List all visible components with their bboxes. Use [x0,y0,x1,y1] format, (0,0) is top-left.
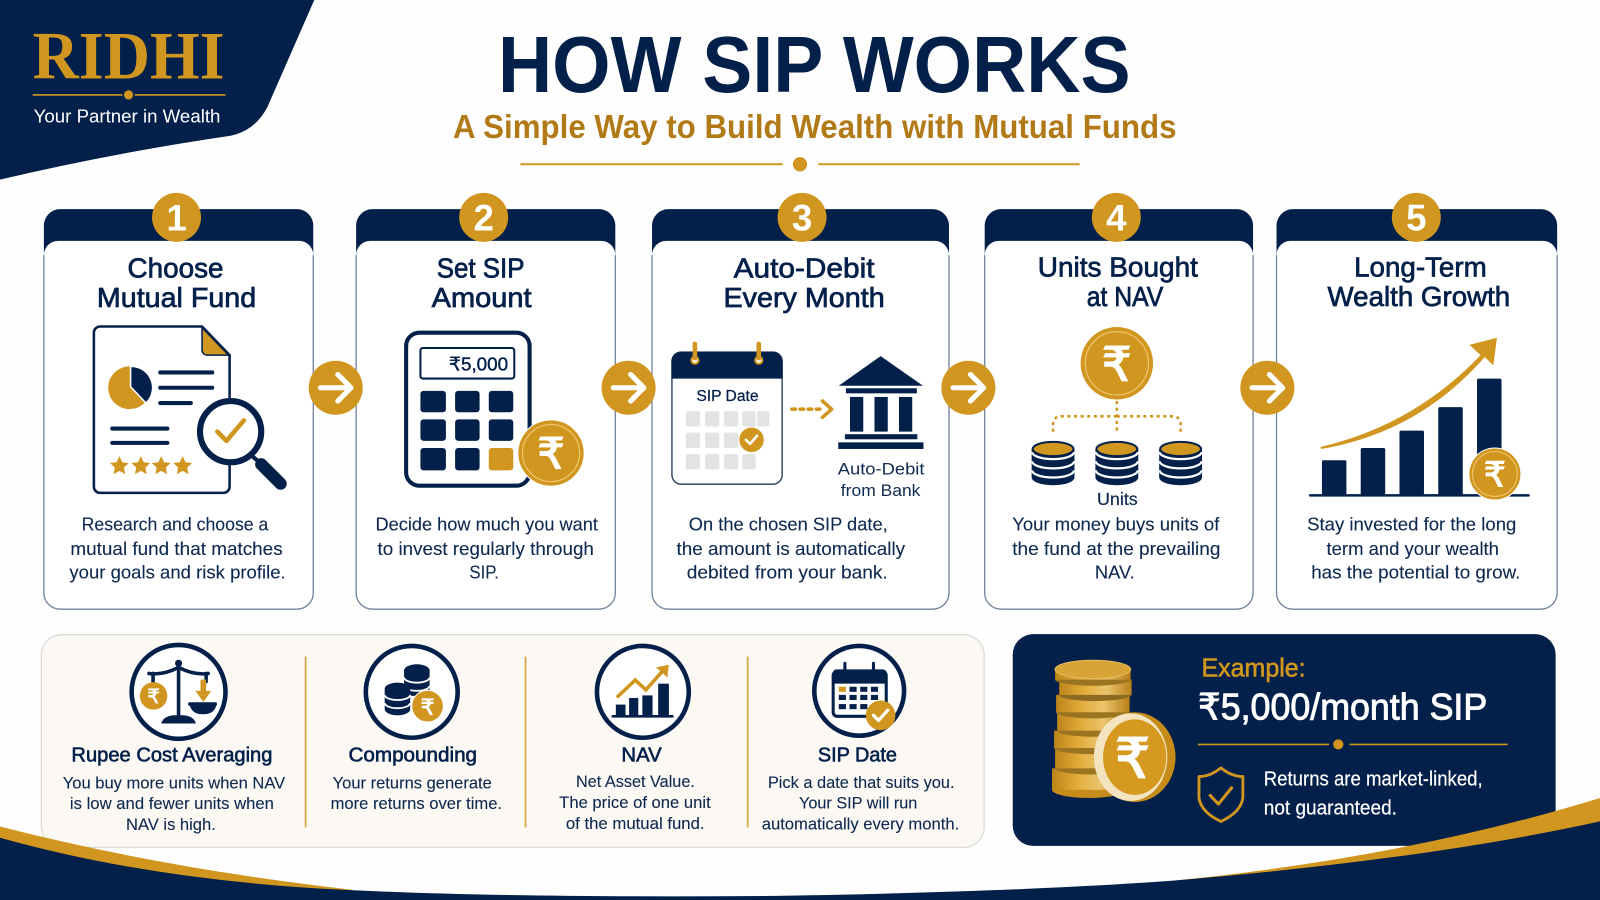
step 1 text: your goals and risk profile. [69,562,286,583]
logo wordmark: RIDHI [33,19,224,94]
arrow: step 1 to 2 [309,361,363,415]
icon: calculator with coin [406,333,584,486]
step number 2: 2 [473,198,494,239]
concept text: NAV is high. [126,815,216,834]
step 2 heading: Set SIP [437,253,524,284]
concept: NAV [559,646,711,833]
icon: calculator with coin: ₹ [537,430,565,478]
concept: rupee cost averaging [63,645,286,834]
step 2 text: SIP. [469,562,499,583]
icon: bank [838,356,923,449]
arrow: dotted calendar to bank [792,401,832,417]
concept heading: Rupee Cost Averaging [71,745,272,767]
concept heading: SIP Date [818,745,897,767]
step 4 heading: at NAV [1087,281,1164,312]
concept heading: Compounding [348,745,477,767]
step 5 text: term and your wealth [1327,538,1499,559]
example amount: ₹5,000/month SIP [1198,686,1487,727]
step number 3: 3 [792,198,812,239]
step 5 text: Stay invested for the long [1307,514,1516,535]
icon: coin stacks [366,646,458,738]
icon: balance scale: ₹ [147,686,160,708]
step number 3 [778,193,827,242]
panel: step 4 [985,193,1253,609]
step number 4: 4 [1106,198,1127,239]
step 3 text: debited from your bank. [687,562,888,583]
concept: SIP date [762,646,959,834]
panel: step 3 [652,193,949,609]
logo badge [0,0,314,180]
step 5 heading: Wealth Growth [1328,281,1510,312]
unit stack 2 [1095,442,1138,485]
step 3 heading: Auto-Debit [734,253,875,284]
step 4 text: Your money buys units of [1012,514,1220,535]
units label: Units [1097,489,1138,509]
step number 1: 1 [166,198,187,239]
icon: calculator with coin: ₹5,000 [449,353,508,374]
concept text: Net Asset Value. [576,772,695,791]
step 4 text: the fund at the prevailing [1012,538,1220,559]
icon: growth chart: ₹ [1484,457,1506,495]
icon: SIP date calendar: SIP Date [696,388,759,405]
concept heading: NAV [621,745,662,767]
example note: not guaranteed. [1264,797,1397,819]
example divider [1198,739,1508,749]
icon: coin to units: ₹ [1102,339,1132,391]
panel: example [1013,634,1556,846]
example note: Returns are market-linked, [1264,769,1483,791]
icon: gold coin stack: ₹ [1115,728,1150,790]
step 2 text: Decide how much you want [376,514,598,535]
bank label: Auto-Debit [838,460,925,478]
logo divider [33,90,226,99]
step number 5: 5 [1406,198,1427,239]
bank label: from Bank [841,482,921,500]
panel: key concepts [41,635,984,847]
step number 4 [1092,193,1141,242]
concept text: Pick a date that suits you. [768,773,955,792]
icon: shield check [1199,768,1243,821]
step 3 heading: Every Month [723,282,885,313]
bottom wave [0,798,1600,900]
step 5 heading: Long-Term [1354,252,1487,283]
panel: step 1 [44,193,313,609]
panel: step 2 [356,193,615,609]
icon: NAV chart [597,646,689,738]
concept text: You buy more units when NAV [63,773,286,792]
arrow: step 2 to 3 [602,361,656,415]
step 2 text: to invest regularly through [378,538,594,559]
step 1 text: Research and choose a [82,514,269,535]
example label: Example: [1202,655,1306,683]
subtitle: A Simple Way to Build Wealth with Mutual Funds [453,109,1177,146]
step number 1 [152,193,201,242]
icon: balance scale [132,645,226,739]
concept text: automatically every month. [762,815,959,834]
title: HOW SIP WORKS [498,20,1131,109]
arrow: step 3 to 4 [941,361,995,415]
concept text: is low and fewer units when [70,794,274,813]
panel: step 5 [1277,193,1557,609]
step 4 text: NAV. [1095,562,1135,583]
step 1 heading: Choose [128,253,223,284]
concept: compounding [331,646,502,813]
step 5 text: has the potential to grow. [1311,562,1520,583]
step 3 text: On the chosen SIP date, [689,514,888,535]
concept text: The price of one unit [559,793,711,812]
icon: gold coin stack [1052,660,1176,802]
icon: coin stacks: ₹ [421,695,434,719]
icon: calendar with check [814,646,904,736]
concept text: of the mutual fund. [566,814,705,833]
icon: coin to units [1032,327,1202,485]
icon: SIP date calendar [671,344,783,484]
step 2 heading: Amount [432,282,532,313]
arrow: step 4 to 5 [1240,361,1294,415]
unit stack 1 [1032,442,1074,485]
title divider [520,157,1080,171]
icon: growth chart [1310,338,1529,500]
concept text: more returns over time. [331,794,502,813]
unit stack 3 [1159,442,1202,485]
concept text: Your returns generate [333,773,492,792]
step 4 heading: Units Bought [1038,252,1198,283]
icon: document with magnifier [94,327,281,493]
step number 5 [1392,193,1441,242]
step number 2 [459,193,508,242]
step 1 heading: Mutual Fund [97,282,256,313]
step 3 text: the amount is automatically [677,538,906,559]
step 1 text: mutual fund that matches [70,538,283,559]
concept text: Your SIP will run [799,794,917,813]
logo tagline: Your Partner in Wealth [34,105,220,126]
